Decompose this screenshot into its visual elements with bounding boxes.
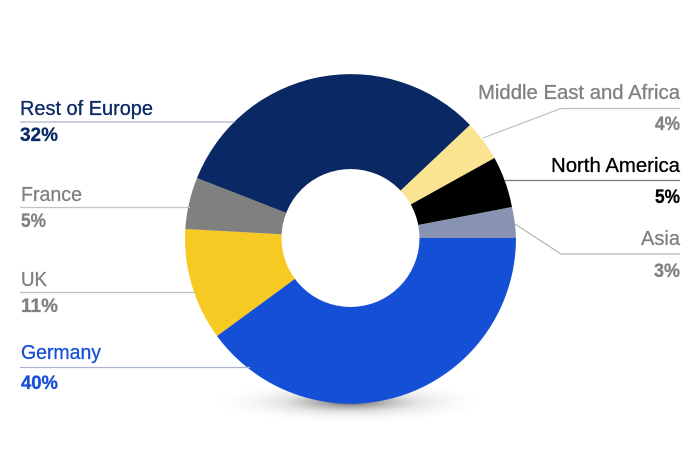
label: Asia: Asia xyxy=(641,228,681,250)
slice: France 5% xyxy=(185,178,350,238)
slice: Rest of Europe 32% xyxy=(197,74,470,238)
label: Middle East and Africa: 4% xyxy=(655,113,680,135)
label: Germany: Germany xyxy=(21,342,101,364)
label: North America: 5% xyxy=(655,186,680,208)
donut chart xyxy=(185,74,516,404)
label: North America: North America xyxy=(551,155,681,177)
label: France: 5% xyxy=(21,210,46,232)
label: Germany: 40% xyxy=(21,372,58,394)
label: France xyxy=(20,184,190,232)
slice: UK 11% xyxy=(185,229,350,336)
label: UK xyxy=(20,269,195,317)
label: Rest of Europe: Rest of Europe xyxy=(20,98,153,120)
donut hole xyxy=(282,169,420,307)
slice: Asia 3% xyxy=(350,207,516,238)
label: Asia: 3% xyxy=(654,260,680,282)
label: North America xyxy=(505,155,681,208)
pie shadow xyxy=(215,381,485,423)
label: France: France xyxy=(21,184,82,206)
label: Middle East and Africa xyxy=(478,82,681,138)
label: Asia xyxy=(515,224,681,282)
slice: Middle East and Africa 4% xyxy=(350,125,494,238)
label: Rest of Europe xyxy=(20,98,235,146)
label: Germany xyxy=(20,342,250,394)
label: Middle East and Africa: Middle East and Africa xyxy=(478,82,681,104)
label: Rest of Europe: 32% xyxy=(20,124,58,146)
label: UK: 11% xyxy=(21,295,58,317)
label: UK: UK xyxy=(21,269,48,291)
slice: North America 5% xyxy=(350,158,512,238)
slice: Germany 40% xyxy=(217,238,516,404)
